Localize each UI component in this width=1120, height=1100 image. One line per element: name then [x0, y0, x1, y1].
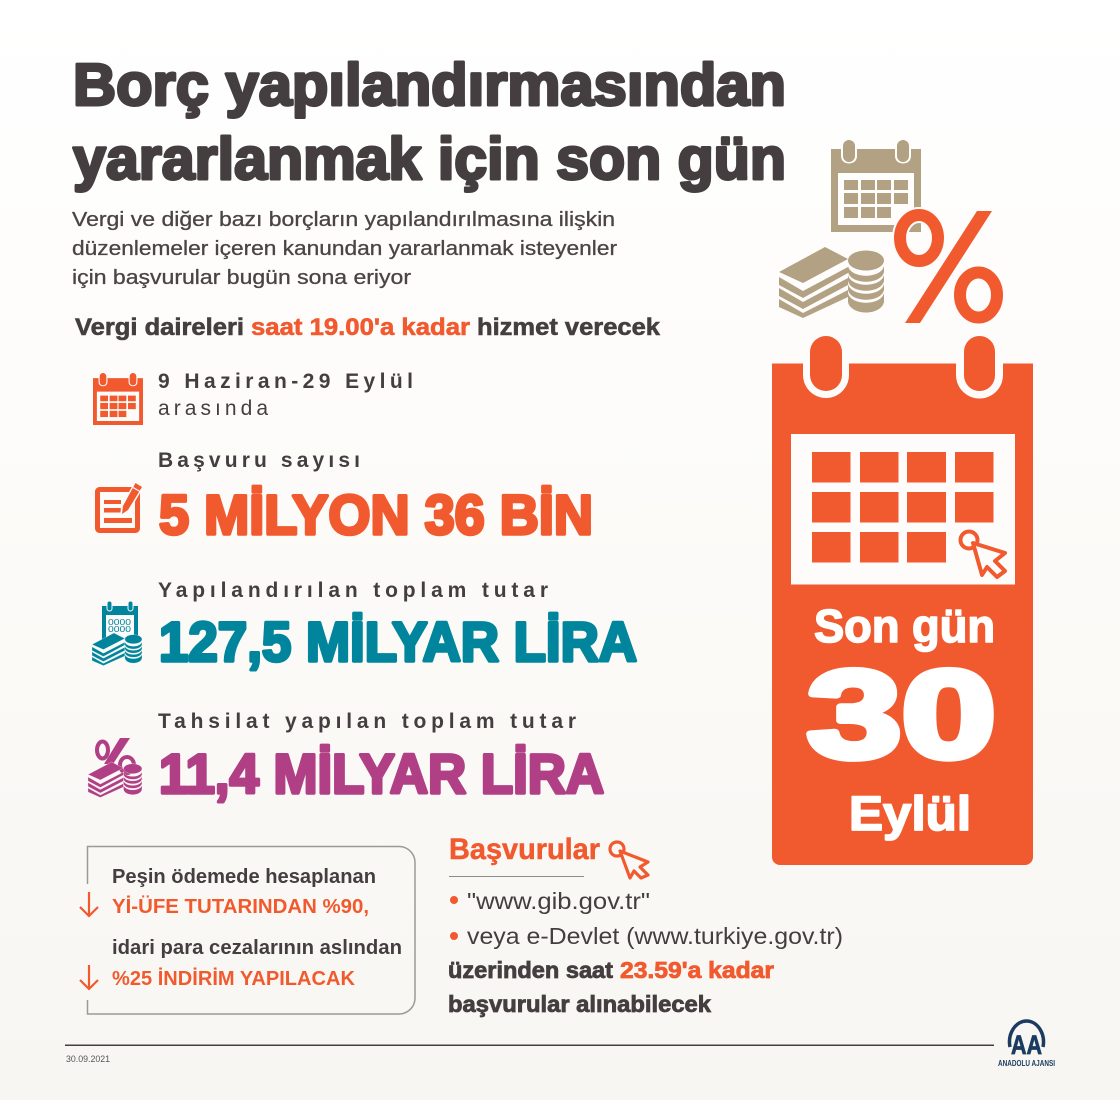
label: restructured total: Yapılandırılan toplam tutar: [158, 579, 548, 602]
icon: teal calendar and money: [92, 601, 142, 666]
text: administrative fines: idari para cezalarının aslından: [112, 937, 402, 959]
title: yararlanmak için son gün: [73, 126, 786, 192]
text: fine discount: %25 İNDİRİM YAPILACAK: [112, 967, 356, 990]
icon: orange calendar: [93, 373, 143, 425]
cursor: [960, 532, 1005, 577]
subheading: service hours: Vergi daireleri: [75, 314, 244, 341]
application channels: "www.gib.gov.tr": [467, 888, 650, 914]
icon: cursor: [610, 842, 648, 878]
label: application count: Başvuru sayısı: [158, 449, 360, 472]
text: last day: Son gün: [814, 600, 995, 652]
logo: Anadolu Ajansi: AA: [1011, 1030, 1042, 1060]
application channels: veya e-Devlet (www.turkiye.gov.tr): [467, 923, 843, 949]
application deadline text: üzerinden saat: [448, 957, 613, 983]
calendar ring right: [956, 336, 1003, 398]
subheading: service hours: [75, 314, 661, 341]
logo: Anadolu Ajansi: ANADOLU AJANSI: [998, 1058, 1055, 1068]
icon: down arrow 2: [80, 965, 98, 989]
application deadline text: [448, 957, 774, 1017]
intro text: [72, 209, 617, 289]
application deadline text: 23.59'a kadar: [620, 957, 774, 983]
footer line: [65, 1044, 994, 1046]
date range text: [158, 370, 413, 420]
intro text: Vergi ve diğer bazı borçların yapılandırılmasına ilişkin: [72, 209, 615, 231]
icon: teal calendar and money: 0000: [108, 617, 131, 627]
calendar ring left: [803, 336, 849, 398]
icon: down arrow 1: [80, 892, 98, 916]
logo: Anadolu Ajansi: [998, 1021, 1055, 1068]
icon: purple percent and money: [88, 738, 142, 798]
label: collected total: Tahsilat yapılan toplam tutar: [158, 710, 576, 733]
value: collected total: 11,4 MİLYAR LİRA: [159, 742, 604, 805]
heading: applications: Başvurular: [449, 833, 600, 866]
intro text: düzenlemeler içeren kanundan yararlanmak isteyenler: [72, 238, 617, 260]
application channels: [450, 888, 843, 949]
value: applications: 5 MİLYON 36 BİN: [159, 483, 593, 546]
intro text: için başvurular bugün sona eriyor: [72, 267, 411, 289]
date range text: 9 Haziran-29 Eylül: [158, 370, 413, 393]
icon: form with pencil: [98, 481, 144, 530]
title: [73, 52, 786, 192]
icon: teal calendar and money: 0000: [108, 624, 131, 634]
calendar grid: [791, 434, 1015, 584]
value: restructured total: 127,5 MİLYAR LİRA: [159, 610, 637, 673]
text: advance payment: Peşin ödemede hesaplanan: [112, 866, 376, 888]
text: PPI discount: Yİ-ÜFE TUTARINDAN %90,: [112, 895, 369, 918]
divider line: [449, 876, 584, 877]
text: 30: 30: [807, 646, 996, 784]
title: Borç yapılandırmasından: [73, 52, 786, 118]
icon: large percent: [900, 211, 997, 323]
icon: tan money: [779, 247, 884, 318]
text: September: Eylül: [849, 788, 971, 841]
subheading: service hours: saat 19.00'a kadar: [251, 314, 470, 341]
panel: large calendar: [772, 336, 1033, 865]
icon: tan calendar: [831, 140, 921, 232]
application deadline text: başvurular alınabilecek: [448, 991, 711, 1017]
date: 30.09.2021: [66, 1054, 110, 1064]
panel: discount callout: [80, 846, 415, 1014]
subheading: service hours: hizmet verecek: [477, 314, 661, 341]
date range text: arasında: [158, 397, 268, 420]
